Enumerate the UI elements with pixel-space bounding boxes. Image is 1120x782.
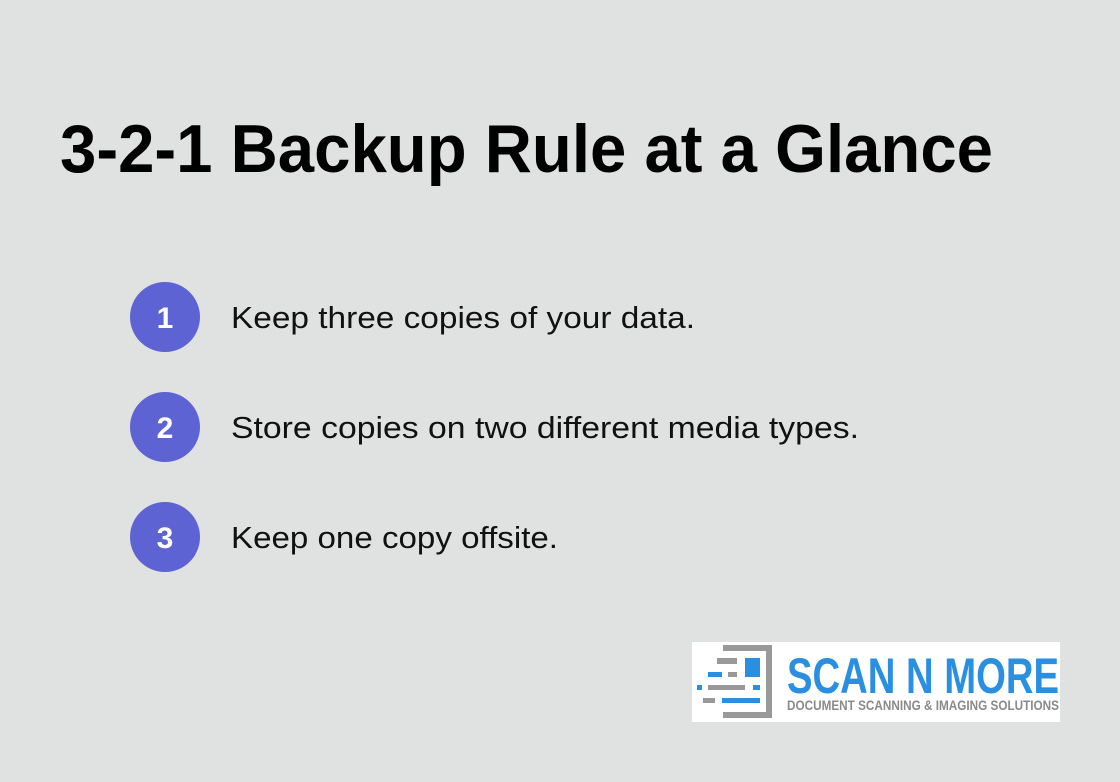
badge 2: 2: [157, 412, 173, 445]
badge 1: 1: [157, 302, 173, 335]
list item 2: [130, 392, 859, 462]
logo tagline: DOCUMENT SCANNING & IMAGING SOLUTIONS: [787, 697, 1059, 713]
list item 1: [130, 282, 695, 352]
text 3: Keep one copy offsite.: [231, 520, 558, 555]
badge 2: [130, 392, 200, 462]
badge 3: [130, 502, 200, 572]
text 1: Keep three copies of your data.: [231, 300, 695, 335]
text 2: Store copies on two different media types.: [231, 410, 859, 445]
logo icon: [697, 645, 772, 718]
badge 1: [130, 282, 200, 352]
badge 3: 3: [157, 522, 173, 555]
logo: [692, 642, 1060, 722]
title: 3-2-1 Backup Rule at a Glance: [60, 111, 993, 187]
list item 3: [130, 502, 558, 572]
